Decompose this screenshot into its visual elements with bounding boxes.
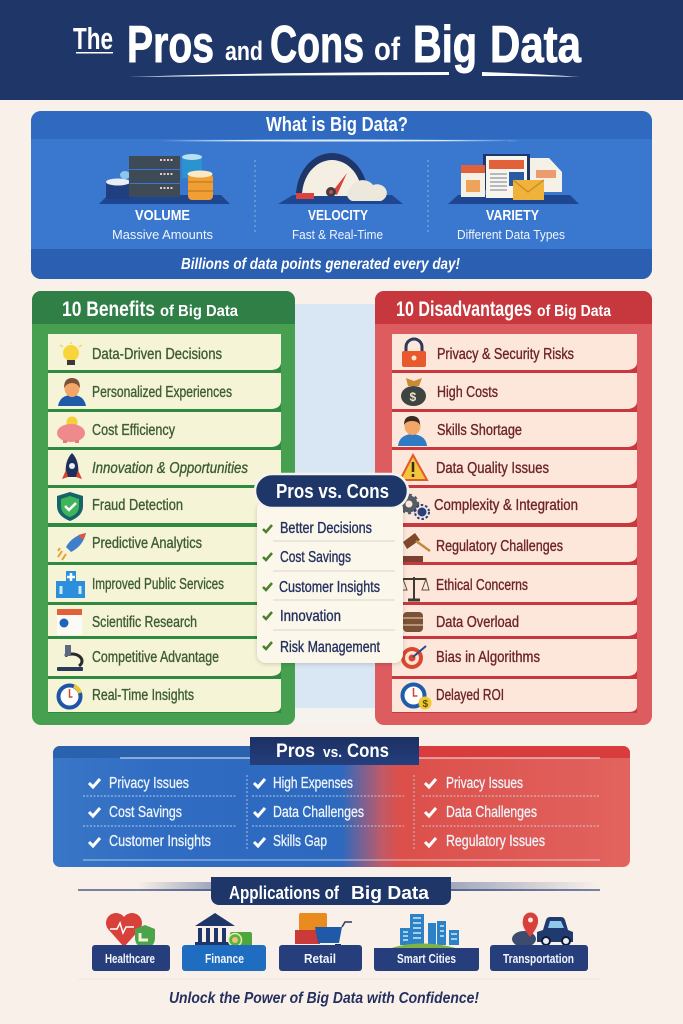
row: innovation and opportunities — [48, 450, 281, 485]
title: The — [73, 21, 113, 56]
row: bias in algorithms: Bias in Algorithms — [436, 649, 540, 666]
icon: speedometer — [278, 153, 403, 204]
label: retail — [279, 945, 362, 971]
title: Cons — [270, 16, 364, 74]
label: velocity: Fast & Real-Time — [292, 227, 383, 242]
label: velocity: VELOCITY — [308, 207, 368, 224]
title: of — [374, 31, 400, 67]
badge: pros vs cons: Pros vs. Cons — [276, 481, 389, 503]
row: scientific research: Scientific Research — [92, 614, 197, 631]
heading: applications: Applications of — [229, 882, 340, 903]
checklist item: cost savings — [263, 549, 351, 566]
row: cost efficiency: Cost Efficiency — [92, 422, 175, 439]
label: healthcare — [92, 945, 170, 971]
center column backdrop — [295, 304, 376, 725]
row: delayed roi: $ — [422, 699, 428, 710]
icon: documents — [448, 154, 579, 204]
checklist item: cost savings: Cost Savings — [280, 549, 351, 566]
checklist item: innovation: Innovation — [280, 608, 341, 625]
icon: transportation — [512, 913, 573, 947]
row: privacy and security risks — [392, 334, 637, 370]
heading: applications — [211, 877, 451, 905]
row: data quality issues: Data Quality Issues — [436, 460, 549, 477]
heading: What is Big Data? — [266, 114, 408, 136]
column: middle list: High Expenses — [273, 775, 353, 792]
column: middle list — [254, 775, 364, 850]
label: volume: Massive Amounts — [112, 227, 213, 242]
heading: disadvantages: 10 Disadvantages — [396, 298, 532, 321]
heading: disadvantages: of Big Data — [537, 303, 611, 320]
label: smart cities — [374, 948, 479, 971]
row: real-time insights — [48, 679, 281, 712]
nameplate: Pros — [276, 741, 315, 762]
footer strip — [31, 249, 652, 279]
section: applications — [78, 877, 600, 971]
panel: pros vs cons comparison — [53, 737, 630, 867]
row: predictive analytics — [48, 527, 281, 562]
label: variety: VARIETY — [486, 207, 539, 224]
row: competitive advantage: Competitive Advantage — [92, 649, 219, 666]
label: finance: Finance — [205, 951, 244, 966]
row: bias in algorithms — [392, 639, 637, 676]
panel: what is big data — [31, 111, 652, 279]
column: right list — [425, 775, 545, 850]
row: regulatory challenges — [392, 527, 637, 562]
row: data quality issues — [392, 450, 637, 485]
row: ethical concerns — [392, 565, 637, 602]
row: real-time insights: Real-Time Insights — [92, 687, 194, 704]
row: fraud detection: Fraud Detection — [92, 497, 183, 514]
row: personalized experiences: Personalized Experiences — [92, 384, 232, 401]
icon: servers — [99, 154, 230, 204]
header banner — [0, 0, 683, 100]
column: right list: Privacy Issues — [446, 775, 523, 792]
title — [73, 16, 582, 77]
row: innovation and opportunities: Innovation & Opportunities — [92, 460, 248, 477]
row: scientific research — [48, 605, 281, 636]
row: privacy and security risks: Privacy & Security Risks — [437, 346, 574, 363]
row: regulatory challenges: Regulatory Challenges — [436, 538, 563, 555]
column: left list — [89, 775, 211, 850]
title: Data — [490, 16, 582, 74]
row: delayed roi: Delayed ROI — [436, 687, 504, 704]
label: volume: VOLUME — [135, 207, 190, 224]
row: improved public services — [48, 565, 281, 602]
panel: benefits — [32, 291, 295, 725]
row: personalized experiences — [48, 373, 281, 409]
row: skills shortage — [392, 412, 637, 447]
row: fraud detection — [48, 488, 281, 523]
nameplate: vs. — [323, 744, 342, 761]
title: Pros — [127, 16, 214, 74]
nameplate — [250, 737, 419, 765]
heading: applications: Big Data — [351, 882, 430, 903]
column: left list: Cost Savings — [109, 804, 182, 821]
checklist item: better decisions: Better Decisions — [280, 520, 372, 537]
row: high costs: $ — [410, 390, 416, 404]
row: competitive advantage — [48, 639, 281, 676]
column: right list: Regulatory Issues — [446, 833, 545, 850]
checklist item: innovation — [263, 608, 341, 625]
label: velocity — [292, 207, 383, 242]
row: data overload — [392, 605, 637, 636]
tagline: Unlock the Power of Big Data with Confidence! — [169, 990, 480, 1007]
label: transportation — [490, 945, 588, 971]
row: cost efficiency — [48, 412, 281, 447]
icon: retail — [295, 913, 352, 948]
row: ethical concerns: Ethical Concerns — [436, 577, 528, 594]
label: smart cities: Smart Cities — [397, 951, 456, 966]
column: right list: Data Challenges — [446, 804, 537, 821]
label: healthcare: Healthcare — [105, 951, 155, 966]
title: Big — [413, 16, 477, 74]
heading: benefits: of Big Data — [160, 303, 238, 320]
label: variety — [457, 207, 565, 242]
row: data-driven decisions — [48, 334, 281, 370]
checklist item: customer insights: Customer Insights — [279, 579, 380, 596]
card: pros vs cons checklist — [257, 500, 403, 663]
label: finance — [182, 945, 266, 971]
footer strip: Billions of data points generated every day! — [181, 256, 461, 273]
row: high costs — [392, 373, 637, 409]
label: variety: Different Data Types — [457, 227, 565, 242]
row: data-driven decisions: Data-Driven Decisions — [92, 346, 222, 363]
label: retail: Retail — [304, 951, 336, 966]
column: left list: Customer Insights — [109, 833, 211, 850]
column: middle list: Data Challenges — [273, 804, 364, 821]
row: complexity and integration: Complexity & Integration — [434, 497, 578, 514]
row: improved public services: Improved Public Services — [92, 576, 224, 593]
icon: finance — [195, 913, 252, 947]
row: data overload: Data Overload — [436, 614, 519, 631]
label: transportation: Transportation — [503, 951, 574, 966]
row: high costs: High Costs — [437, 384, 498, 401]
checklist item: risk management: Risk Management — [280, 639, 381, 656]
heading: benefits: 10 Benefits — [62, 298, 155, 321]
icon: healthcare — [106, 913, 155, 950]
row: skills shortage: Skills Shortage — [437, 422, 522, 439]
heading: benefits — [62, 298, 238, 321]
icon: smart cities — [383, 914, 466, 951]
row: delayed roi — [392, 679, 637, 712]
label: volume — [112, 207, 213, 242]
nameplate: Cons — [347, 741, 389, 762]
badge: pros vs cons — [255, 474, 408, 508]
title: and — [225, 36, 263, 66]
row: predictive analytics: Predictive Analytics — [92, 535, 202, 552]
column: left list: Privacy Issues — [109, 775, 189, 792]
column: middle list: Skills Gap — [273, 833, 327, 850]
panel: disadvantages — [375, 291, 652, 725]
row: complexity and integration — [392, 488, 637, 523]
